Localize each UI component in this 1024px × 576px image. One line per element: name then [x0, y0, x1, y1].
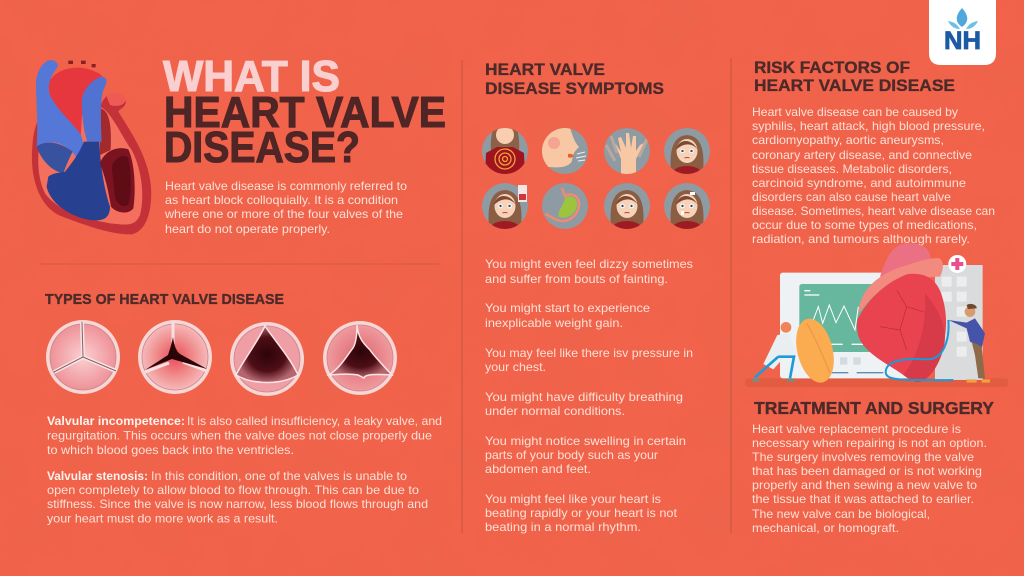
text block: treatment: Heart valve replacement procedure is: [752, 422, 961, 436]
title: DISEASE?: [164, 123, 360, 172]
text block: symptoms: your chest.: [485, 360, 546, 374]
text block: treatment: The new valve can be biological,: [752, 507, 930, 521]
icon: breath: [542, 128, 588, 174]
text block: risk factors: tissue diseases. Metabolic disorders,: [752, 162, 952, 176]
icon: trembling hand: [604, 128, 650, 174]
text block: intro: [164, 179, 407, 236]
text block: symptoms: You might notice swelling in certain: [485, 434, 686, 448]
text block: treatment: the tissue that it was attached to earlier.: [752, 492, 974, 506]
icon: heart anatomy: [32, 60, 151, 234]
text block: risk factors: occur due to some types of medications,: [752, 218, 977, 232]
text block: treatment: The surgery involves removing the valve: [752, 450, 974, 464]
pill: [790, 315, 840, 387]
heading: symptoms: [485, 60, 664, 98]
text block: risk factors: coronary artery disease, and connective: [752, 148, 972, 162]
heading: types: TYPES OF HEART VALVE DISEASE: [45, 291, 284, 308]
hospital building: [935, 255, 983, 380]
heading: symptoms: DISEASE SYMPTOMS: [485, 79, 664, 98]
text block: risk factors: radiation, and tumours although rarely.: [752, 232, 970, 246]
symptom icons: [482, 126, 710, 233]
stethoscope: [886, 320, 953, 380]
text block: symptoms: You may feel like there isv pressure in: [485, 346, 693, 360]
text block: intro: heart do not operate properly.: [165, 222, 330, 236]
text block: symptoms: beating rapidly or your heart is not: [485, 506, 678, 520]
text block: symptoms: You might have difficulty breathing: [485, 390, 683, 404]
icon: weight gain girl: [482, 183, 528, 233]
text block: intro: Heart valve disease is commonly referred to: [165, 179, 407, 193]
heading: risk factors: RISK FACTORS OF: [754, 58, 910, 77]
text block: intro: as heart block colloquially. It is a condition: [165, 193, 398, 207]
text block: valve types: your heart must do more work as a result.: [47, 512, 278, 526]
heading: risk factors: [754, 58, 955, 95]
title: HEART VALVE: [164, 88, 446, 137]
illustration: treatment: [745, 243, 1008, 387]
text block: intro: where one or more of the four valves of the: [164, 207, 403, 221]
text block: valve types: open completely to allow blood to flow through. This can be due to: [47, 483, 419, 497]
text block: valve types: Valvular incompetence:: [47, 414, 185, 428]
text block: symptoms: parts of your body such as your: [485, 448, 658, 462]
valve 4: stenosis irregular: [323, 321, 397, 395]
text block: symptoms: You might even feel dizzy sometimes: [485, 257, 693, 271]
valve diagrams: [46, 320, 397, 396]
text block: valve types: Valvular stenosis:: [47, 469, 148, 483]
icon: palpitation girl: [664, 183, 710, 233]
text block: symptoms: [485, 257, 693, 534]
text block: valve types: It is also called insufficiency, a leaky valve, and: [187, 414, 442, 428]
text block: risk factors: disease. Sometimes, heart valve disease can: [752, 204, 995, 218]
text block: symptoms: beating in a normal rhythm.: [485, 520, 641, 534]
text block: treatment: [752, 422, 987, 535]
text block: valve types: In this condition, one of the valves is unable to: [151, 469, 407, 483]
text block: symptoms: You might start to experience: [485, 301, 650, 315]
icon: chest pain: [482, 126, 528, 174]
valve 1: normal closed: [46, 320, 120, 394]
text block: symptoms: and suffer from bouts of fainting.: [485, 272, 668, 286]
big heart: [857, 243, 946, 382]
text block: risk factors: [752, 105, 995, 246]
valve 3: stenosis open: [230, 322, 304, 396]
icon: stomach: [542, 183, 588, 229]
heading: risk factors: HEART VALVE DISEASE: [754, 76, 955, 95]
text block: treatment: necessary when repairing is not an option.: [752, 436, 987, 450]
man: [948, 304, 990, 383]
text block: symptoms: inexplicable weight gain.: [485, 316, 623, 330]
text block: symptoms: under normal conditions.: [485, 404, 625, 418]
text block: risk factors: Heart valve disease can be caused by: [752, 105, 958, 119]
text block: symptoms: You might feel like your heart is: [485, 492, 661, 506]
text block: valve types: regurgitation. This occurs when the valve does not close properly due: [47, 428, 432, 442]
title: [163, 52, 446, 172]
heading: symptoms: HEART VALVE: [485, 60, 605, 79]
logo: NH: [929, 0, 996, 65]
text block: risk factors: carcinoid syndrome, and autoimmune: [752, 176, 966, 190]
title: WHAT IS: [163, 52, 340, 101]
text block: risk factors: syphilis, heart attack, high blood pressure,: [752, 119, 985, 133]
heading: treatment: TREATMENT AND SURGERY: [754, 398, 994, 418]
text block: treatment: mechanical, or homograft.: [752, 521, 899, 535]
text block: risk factors: cardiomyopathy, aortic aneurysms,: [752, 133, 944, 147]
text block: risk factors: disorders can also cause heart valve: [752, 190, 951, 204]
doctor: [752, 322, 797, 382]
text block: valve types: [47, 414, 442, 526]
text block: symptoms: abdomen and feet.: [485, 462, 591, 476]
text block: treatment: properly and then sewing a new valve to: [752, 478, 977, 492]
icon: dizzy girl: [664, 128, 710, 178]
text block: valve types: stiffness. Since the valve is now narrow, less blood flows through and: [47, 497, 428, 511]
icon: breathless girl: [604, 183, 650, 233]
valve 2: incompetent: [138, 320, 212, 394]
text block: valve types: to which blood goes back into the ventricles.: [47, 443, 294, 457]
text block: treatment: that has been damaged or is not working: [752, 464, 982, 478]
monitor: [780, 273, 917, 378]
logo: NH: NH: [944, 27, 981, 55]
